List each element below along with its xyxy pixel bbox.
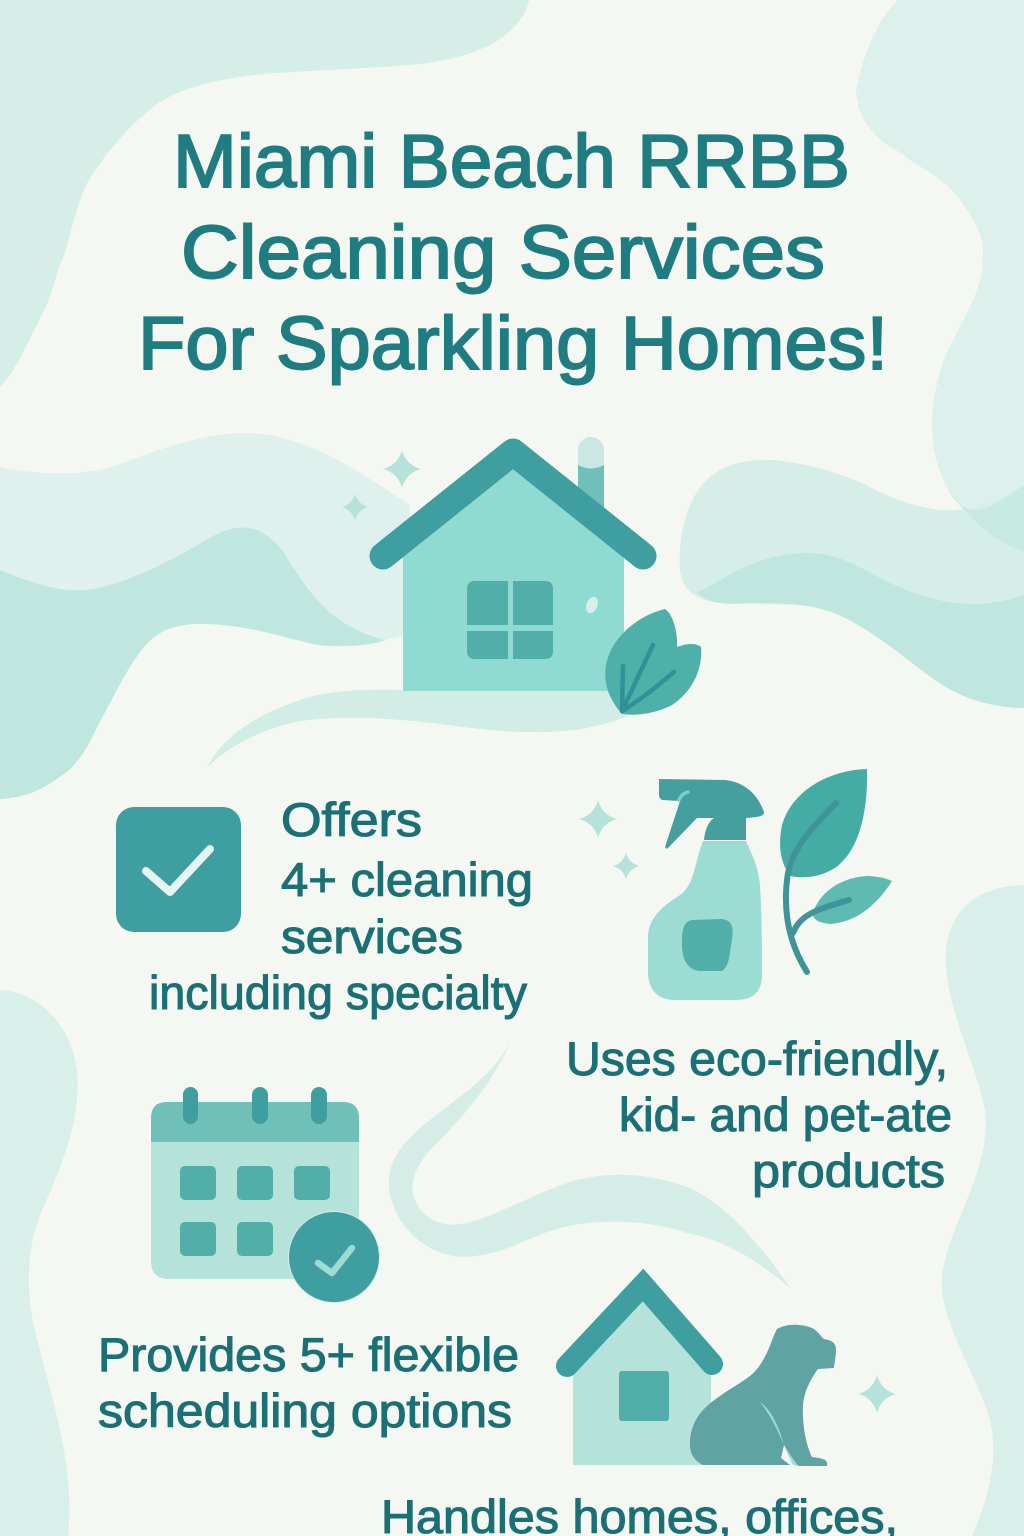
title [138,119,888,385]
text: services: services [281,910,463,963]
icon: house with dog [567,1285,896,1466]
text: eco-friendly [566,1032,952,1197]
bottle label [682,919,733,971]
icon: spray bottle with leaves [579,769,892,1000]
trigger highlight [679,792,688,800]
decorative swoosh: middle [389,1040,790,1288]
callout: flexible scheduling [98,1087,519,1437]
calendar rings [183,1087,327,1124]
window [467,581,553,659]
sparkle [858,1375,896,1413]
calendar page [151,1140,359,1279]
check badge [288,1212,380,1302]
text: scheduling [98,1328,519,1437]
text: eco-friendly: Uses eco-friendly, [566,1032,948,1085]
title: For Sparkling Homes! [138,301,888,385]
small house window [619,1371,669,1421]
dog [690,1325,836,1466]
dog leg highlight [760,1402,798,1466]
calendar header [151,1102,359,1142]
door knob [584,595,600,615]
leaf small [813,876,892,924]
leaf large [780,769,867,877]
text: services: including specialty [149,966,527,1019]
text: scheduling: Provides 5+ flexible [98,1328,519,1381]
callout: cleaning services [116,793,533,1019]
calendar cells [180,1166,330,1256]
text: services: Offers [281,793,422,846]
trigger head [659,779,764,849]
sparkles [342,450,421,520]
icon: calendar [151,1087,380,1302]
icon: main house with leaf [342,437,701,715]
text: services: 4+ cleaning [281,853,533,906]
leaf [605,609,701,715]
roof [383,452,643,556]
bottle body [648,841,762,1000]
text: eco-friendly: products [752,1144,945,1197]
text: services [149,793,533,1019]
decorative swoosh: under main house [207,690,628,768]
title: Miami Beach RRBB [173,119,850,203]
chimney [578,437,604,517]
small house roof [567,1285,712,1366]
sparkles [579,800,639,879]
stem [786,803,849,972]
icon: checkbox [116,807,241,932]
small house body [573,1295,711,1465]
callout: eco-friendly products [566,769,952,1197]
text: scheduling: scheduling options [98,1384,512,1437]
title: Cleaning Services [181,210,825,294]
callout: homes and offices [381,1285,898,1536]
text: eco-friendly: kid- and pet-ate [619,1088,952,1141]
house body [403,469,624,691]
